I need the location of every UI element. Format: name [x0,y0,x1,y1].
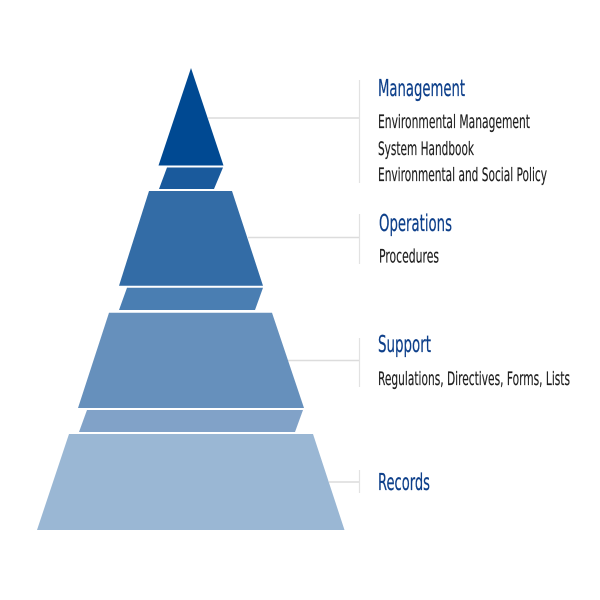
heading: operations: Operations [379,211,452,237]
pyramid band: support to records [79,410,303,432]
pyramid tier: management triangle [158,68,224,166]
pyramid band: management to operations [159,168,223,189]
text block: operations [379,211,452,268]
pyramid tier: records [37,434,344,530]
pyramid tier: operations [119,191,263,286]
body text: procedures: Procedures [379,246,439,268]
pyramid band: operations to support [119,288,263,310]
pyramid tier: support [78,313,304,408]
heading: management: Management [378,76,465,102]
body text: management documents: System Handbook [378,138,474,160]
text block: support [378,332,570,390]
heading: support: Support [378,332,431,358]
text block: management [378,76,547,186]
heading: records: Records [378,470,430,496]
body text: management documents [378,111,547,186]
